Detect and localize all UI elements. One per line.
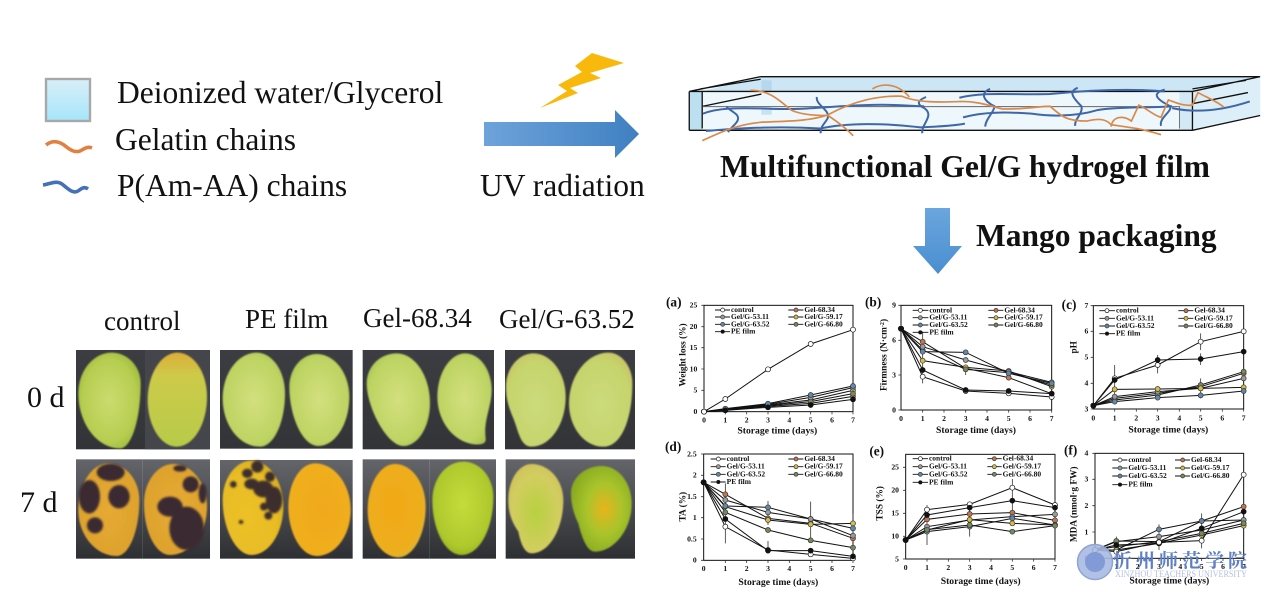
- chart (c): pH: Storage time (days): [1128, 425, 1208, 436]
- column labels: [104, 303, 635, 336]
- legend (c): control: [1116, 306, 1139, 315]
- chart (e): TSS: 15: [891, 509, 899, 518]
- legend (d): Gel/G-59.17: [804, 462, 843, 471]
- chart (f): MDA: 3: [1085, 475, 1089, 484]
- watermark: Xinzhou Teachers University: 忻州师范学院: [1113, 546, 1247, 573]
- legend (d): Gel/G-53.11: [727, 462, 765, 471]
- chart (e): TSS: 2: [946, 563, 950, 572]
- row label: 7 d: 7 d: [20, 486, 58, 519]
- photo: control 7 d: [76, 459, 210, 559]
- photo: control 0 d: [76, 350, 210, 449]
- chart (a): weight loss: Weight loss (%): [678, 323, 689, 387]
- arrow: UV radiation: [484, 110, 639, 158]
- chart (e): TSS: 0: [904, 563, 908, 572]
- chart (e): TSS: [869, 444, 1057, 587]
- chart (a): weight loss: 0: [702, 416, 706, 425]
- legend (a): Gel/G-66.80: [804, 319, 843, 328]
- chart (e): TSS: 5: [895, 554, 899, 563]
- chart (a): weight loss: 1: [723, 416, 727, 425]
- legend (e): control: [929, 454, 952, 463]
- chart (f): MDA: MDA (nmol·g FW): [1069, 467, 1080, 542]
- chart (d): TA: 0: [693, 556, 697, 565]
- photo: PE film 7 d: [220, 460, 353, 559]
- chart (b): firmness: 6: [892, 336, 896, 345]
- chart (e): TSS: 6: [1032, 563, 1036, 572]
- chart (c): pH: 5: [1085, 353, 1089, 362]
- legend (d): control: [727, 454, 749, 463]
- chart (c): pH: [1062, 297, 1246, 436]
- chart (a): weight loss: Storage time (days): [737, 426, 817, 437]
- chart (b): firmness: [865, 295, 1054, 436]
- chart (b): firmness: 9: [892, 301, 896, 310]
- chart (d): TA: 0.5: [687, 534, 697, 543]
- chart (a): weight loss: 20: [690, 322, 698, 331]
- legend (c): PE film: [1116, 329, 1141, 338]
- chart (c): pH: 3: [1085, 404, 1089, 413]
- legend (c): [1099, 306, 1233, 338]
- chart (c): pH: 6: [1085, 327, 1089, 336]
- chart (a): weight loss: 5: [694, 386, 698, 395]
- chart (c): pH: 1: [1113, 414, 1117, 423]
- chart (f): MDA: 5: [1200, 562, 1204, 571]
- chart (a): weight loss: 6: [830, 416, 834, 425]
- chart (b): firmness: -2: [880, 322, 886, 327]
- legend (e): Gel/G-63.52: [929, 469, 968, 478]
- chart (c): pH: 2: [1134, 414, 1138, 423]
- chart (e): TSS: Storage time (days): [941, 576, 1021, 587]
- legend (b): control: [929, 305, 952, 314]
- chart (f): MDA: 6: [1221, 562, 1225, 571]
- chart (a): weight loss: 2: [745, 416, 749, 425]
- photo: PE film 0 d: [220, 350, 353, 449]
- legend: deionized water/glycerol swatch: Deionized water/Glycerol: [117, 75, 443, 110]
- chart (f): MDA: 1: [1085, 527, 1089, 536]
- chart (b): firmness: 4: [985, 414, 989, 423]
- chart (e): TSS: 4: [989, 563, 993, 572]
- chart (c): pH: 4: [1177, 414, 1181, 423]
- chart (d): TA: Storage time (days): [738, 577, 818, 588]
- chart (a): weight loss: 7: [851, 416, 855, 425]
- watermark: Xinzhou Teachers University: [1078, 544, 1247, 580]
- chart (b): firmness: 3: [964, 414, 968, 423]
- chart (f): MDA: 0: [1085, 554, 1089, 563]
- chart (c): pH: 7: [1085, 301, 1089, 310]
- legend (b): Gel/G-63.52: [929, 320, 968, 329]
- chart (e): TSS: 20: [891, 486, 899, 495]
- chart (b): firmness: Firmness (N·cm: [880, 327, 890, 391]
- legend (b): Gel/G-66.80: [1004, 320, 1043, 329]
- chart (a): weight loss: 4: [787, 416, 791, 425]
- legend (b): Gel/G-53.11: [929, 313, 968, 322]
- text: UV radiation: UV radiation: [480, 168, 645, 203]
- chart (e): TSS: 25: [891, 463, 899, 472]
- chart (e): TSS: 5: [1010, 563, 1014, 572]
- chart (e): TSS: 1: [925, 563, 929, 572]
- legend (d): Gel/G-63.52: [727, 469, 765, 478]
- legend (b): Gel-68.34: [1004, 305, 1035, 314]
- mango photos: control and PE film: [76, 350, 353, 559]
- chart (c): pH: 6: [1220, 414, 1224, 423]
- chart (f): MDA: [1064, 442, 1246, 587]
- legend (d): PE film: [727, 477, 752, 486]
- legend (f): PE film: [1128, 480, 1153, 489]
- chart (d): TA: 1.5: [687, 492, 697, 501]
- legend (a): control: [731, 305, 754, 314]
- legend (a): Gel/G-59.17: [804, 312, 843, 321]
- chart (d): TA: 2.5: [687, 449, 697, 458]
- legend (f): Gel/G-53.11: [1128, 463, 1167, 472]
- chart (b): firmness: 7: [1050, 414, 1054, 423]
- column labels: control: [104, 306, 180, 336]
- chart (b): firmness: 6: [1028, 414, 1032, 423]
- legend (b): PE film: [929, 327, 954, 336]
- legend (f): control: [1128, 455, 1151, 464]
- chart (b): firmness: 0: [899, 414, 903, 423]
- legend (d): Gel-68.34: [804, 454, 835, 463]
- legend (a): Gel/G-53.11: [731, 312, 769, 321]
- chart (c): pH: (c): [1062, 297, 1076, 312]
- chart (f): MDA: 7: [1242, 562, 1246, 571]
- chart (d): TA: 0: [702, 564, 706, 573]
- legend (a): [715, 305, 843, 336]
- legend (e): [913, 454, 1041, 486]
- chart (d): TA: 2: [745, 564, 749, 573]
- chart (e): TSS: 3: [968, 563, 972, 572]
- row label: 0 d: 0 d: [27, 381, 64, 414]
- chart (d): TA: TA (%): [677, 492, 688, 521]
- chart (b): firmness: ): [879, 319, 890, 322]
- chart (d): TA: 7: [851, 564, 855, 573]
- chart (e): TSS: 7: [1053, 563, 1057, 572]
- chart (e): TSS: TSS (%): [875, 486, 886, 521]
- chart (f): MDA: (f): [1064, 442, 1077, 457]
- chart (c): pH: 3: [1156, 414, 1160, 423]
- chart (a): weight loss: 5: [809, 416, 813, 425]
- chart (f): MDA: Storage time (days): [1129, 576, 1209, 587]
- chart (b): firmness: Storage time (days): [936, 425, 1016, 436]
- legend (b): Gel/G-59.17: [1004, 313, 1043, 322]
- legend: deionized water/glycerol swatch: [46, 75, 443, 121]
- chart (e): TSS: (e): [869, 444, 884, 459]
- chart (d): TA: 1: [693, 513, 697, 522]
- legend (f): Gel/G-66.80: [1191, 471, 1230, 480]
- chart (a): weight loss: (a): [666, 295, 682, 310]
- legend (c): Gel/G-66.80: [1194, 321, 1233, 330]
- chart (d): TA: 5: [809, 564, 813, 573]
- chart (d): TA: 2: [693, 471, 697, 480]
- chart (c): pH: 7: [1242, 414, 1246, 423]
- legend (a): PE film: [731, 327, 756, 336]
- legend (b): [913, 305, 1043, 336]
- hydrogel film illustration: [689, 77, 1260, 141]
- chart (d): TA: 6: [830, 564, 834, 573]
- watermark: Xinzhou Teachers University: XINZHOU TEACHERS UNIVERSITY: [1115, 569, 1247, 579]
- legend (d): Gel/G-66.80: [804, 469, 843, 478]
- legend (e): Gel/G-59.17: [1003, 462, 1041, 471]
- photo: Gel/G-63.52 7 d: [506, 459, 635, 559]
- chart (f): MDA: 3: [1157, 562, 1161, 571]
- legend (c): Gel/G-53.11: [1116, 313, 1154, 322]
- chart (b): firmness: (b): [865, 295, 881, 310]
- legend (c): Gel-68.34: [1194, 306, 1225, 315]
- chart (b): firmness: 1: [921, 414, 925, 423]
- legend (e): Gel/G-53.11: [929, 462, 967, 471]
- arrow: down to mango packaging: [913, 208, 962, 274]
- legend (e): PE film: [929, 477, 954, 486]
- chart (b): firmness: 3: [892, 370, 896, 379]
- chart (a): weight loss: 0: [694, 407, 698, 416]
- chart (f): MDA: 4: [1178, 562, 1182, 571]
- legend (f): Gel/G-59.17: [1191, 463, 1230, 472]
- legend (a): Gel-68.34: [804, 305, 835, 314]
- heading: multifunctional film: Multifunctional Gel/G hydrogel film: [720, 149, 1210, 184]
- chart (c): pH: 4: [1085, 379, 1089, 388]
- chart (d): TA: (d): [665, 439, 681, 454]
- legend: gelatin chains: Gelatin chains: [115, 122, 296, 157]
- chart (b): firmness: 2: [942, 414, 946, 423]
- chart (f): MDA: 1: [1114, 562, 1118, 571]
- column labels: Gel/G-63.52: [499, 304, 635, 334]
- chart (d): TA: [665, 439, 855, 588]
- mango photos: Gel-68.34 and Gel/G-63.52: [363, 350, 635, 559]
- legend (f): [1112, 455, 1230, 489]
- chart (d): TA: 3: [766, 564, 770, 573]
- icon: lightning bolt: [540, 53, 624, 108]
- chart (b): firmness: 0: [892, 405, 896, 414]
- heading: mango packaging: Mango packaging: [976, 218, 1217, 253]
- legend (e): Gel-68.34: [1003, 454, 1033, 463]
- chart (a): weight loss: 10: [690, 364, 698, 373]
- column labels: Gel-68.34: [363, 303, 472, 333]
- photo: Gel/G-63.52 0 d: [505, 350, 635, 449]
- legend: P(Am-AA) chains: P(Am-AA) chains: [117, 168, 347, 203]
- legend (e): Gel/G-66.80: [1003, 469, 1041, 478]
- legend (a): Gel/G-63.52: [731, 319, 770, 328]
- chart (e): TSS: 10: [891, 532, 899, 541]
- column labels: PE film: [245, 304, 328, 334]
- legend (f): Gel-68.34: [1191, 455, 1222, 464]
- legend (c): Gel/G-63.52: [1116, 321, 1155, 330]
- chart (a): weight loss: 15: [690, 343, 698, 352]
- chart (f): MDA: 2: [1085, 501, 1089, 510]
- chart (c): pH: pH: [1070, 340, 1080, 354]
- legend (c): Gel/G-59.17: [1194, 313, 1233, 322]
- photo: Gel-68.34 7 d: [363, 459, 496, 559]
- chart (d): TA: 1: [723, 564, 727, 573]
- chart (d): TA: 4: [787, 564, 791, 573]
- chart (c): pH: 0: [1091, 414, 1095, 423]
- photo: Gel-68.34 0 d: [363, 350, 494, 449]
- chart (a): weight loss: 25: [690, 301, 698, 310]
- chart (f): MDA: 2: [1136, 562, 1140, 571]
- chart (f): MDA: 0: [1093, 562, 1097, 571]
- chart (a): weight loss: 3: [766, 416, 770, 425]
- legend (f): Gel/G-63.52: [1128, 471, 1167, 480]
- chart (f): MDA: 4: [1085, 449, 1089, 458]
- chart (a): weight loss: [666, 295, 855, 437]
- chart (c): pH: 5: [1199, 414, 1203, 423]
- legend (d): [711, 454, 843, 486]
- chart (b): firmness: 5: [1007, 414, 1011, 423]
